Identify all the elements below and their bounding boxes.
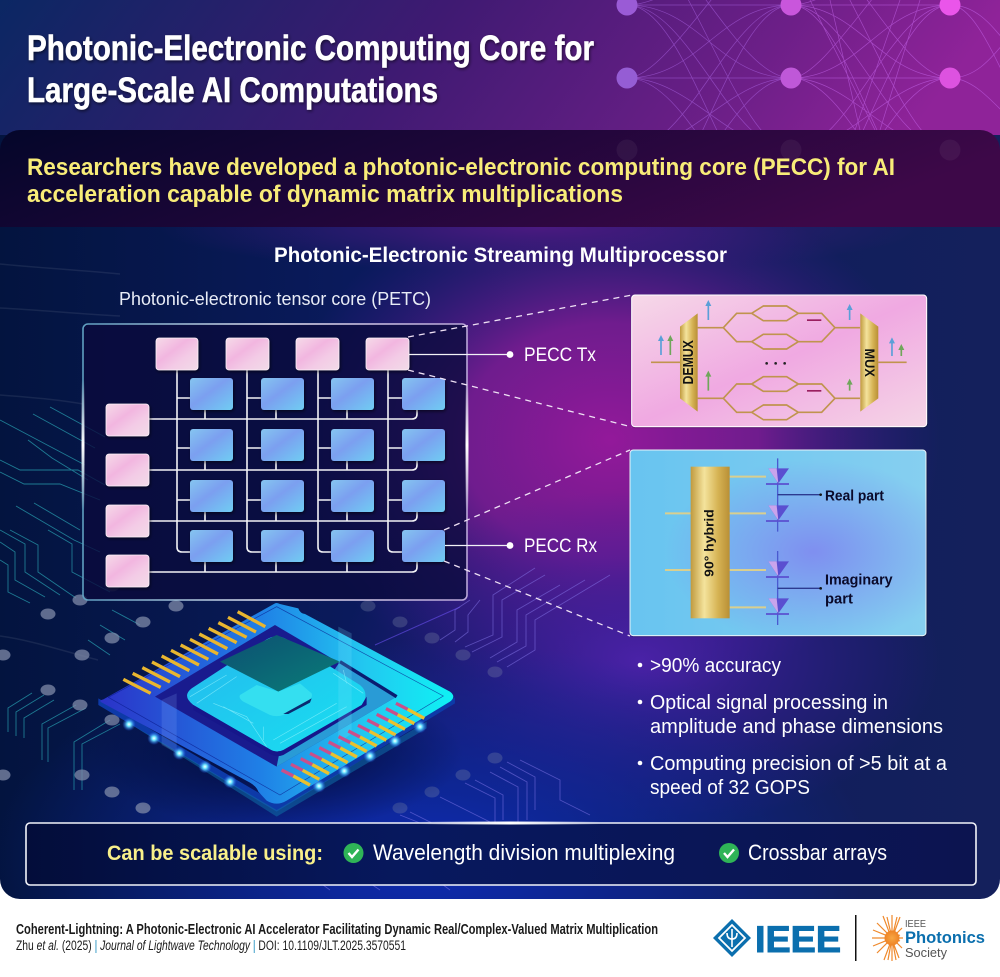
phase shifter marks and ellipsis (807, 319, 821, 392)
summary text (27, 154, 895, 208)
callout: PECC Tx: PECC Tx (524, 345, 596, 366)
icon: green check (344, 843, 364, 863)
bullet list: key results: amplitude and phase dimensions (650, 716, 943, 738)
panel: PECC Rx detail (630, 450, 926, 636)
label: real part: Real part (825, 489, 884, 505)
waveguides (665, 477, 766, 607)
bullet list: key results (638, 655, 948, 799)
logo: IEEE: IEEE (755, 919, 841, 960)
MUX block: MUX (862, 348, 878, 377)
panel: PECC Tx detail (632, 295, 927, 427)
logo: IEEE Photonics Society: Photonics (905, 929, 985, 947)
citation (16, 922, 658, 953)
label: imaginary part (778, 572, 893, 607)
logo: IEEE Photonics Society (872, 915, 985, 961)
bullet list: key results: Optical signal processing in (650, 692, 888, 714)
PECC Rx units (190, 378, 445, 562)
citation: Zhu et al. (2025) | Journal of Lightwave Technology | DOI: 10.1109/JLT.2025.3570551 (16, 938, 406, 953)
photodiodes (766, 458, 789, 625)
callout: PECC Rx (445, 536, 597, 557)
network graphic: nodes and links at top right (616, 0, 1000, 225)
icon: green check (719, 843, 739, 863)
DEMUX block (680, 313, 698, 412)
90 degree hybrid block: 90° hybrid (702, 509, 717, 577)
illustration: isometric chip (90, 603, 463, 830)
DEMUX block: DEMUX (681, 340, 697, 384)
scalable label: Can be scalable using: (107, 842, 323, 865)
panel: summary band (0, 130, 1000, 227)
MUX block (860, 313, 878, 412)
bullet list: key results: Computing precision of >5 bit at a (650, 753, 948, 775)
label: imaginary part: part (825, 591, 853, 607)
waveguides (651, 306, 907, 420)
logo: IEEE (713, 919, 841, 960)
bullet list: key results: >90% accuracy (650, 655, 781, 677)
label: real part (778, 489, 884, 505)
PECC Tx units (106, 338, 409, 587)
panel: scalability box (26, 822, 976, 885)
callout: PECC Rx: PECC Rx (524, 536, 597, 557)
dashed zoom connectors (408, 295, 632, 636)
bullet list: key results: speed of 32 GOPS (650, 777, 810, 799)
interconnect grid (149, 370, 417, 572)
label: PETC: Photonic-electronic tensor core (PETC) (119, 289, 431, 309)
option: wavelength division multiplexing: Wavelength division multiplexing (373, 840, 675, 865)
summary text: Researchers have developed a photonic-electronic computing core (PECC) for AI (27, 154, 895, 181)
panel: photonic-electronic tensor core frame (82, 324, 468, 600)
callout: PECC Tx (409, 345, 596, 366)
label: imaginary part: Imaginary (825, 572, 893, 588)
title (27, 29, 594, 110)
option: crossbar arrays: Crossbar arrays (748, 840, 887, 865)
citation: Coherent-Lightning: A Photonic-Electronic AI Accelerator Facilitating Dynamic Real/Complex-Valued Matrix Multiplication (16, 922, 658, 938)
90 degree hybrid block (691, 467, 730, 618)
heading: multiprocessor: Photonic-Electronic Streaming Multiprocessor (274, 244, 727, 267)
logo: IEEE Photonics Society: Society (905, 945, 947, 960)
summary text: acceleration capable of dynamic matrix multiplications (27, 181, 623, 208)
title: Large-Scale AI Computations (27, 71, 438, 110)
title: Photonic-Electronic Computing Core for (27, 29, 594, 68)
logo: IEEE Photonics Society: IEEE (905, 918, 926, 930)
wavelength arrows (661, 303, 901, 391)
divider (855, 915, 856, 961)
